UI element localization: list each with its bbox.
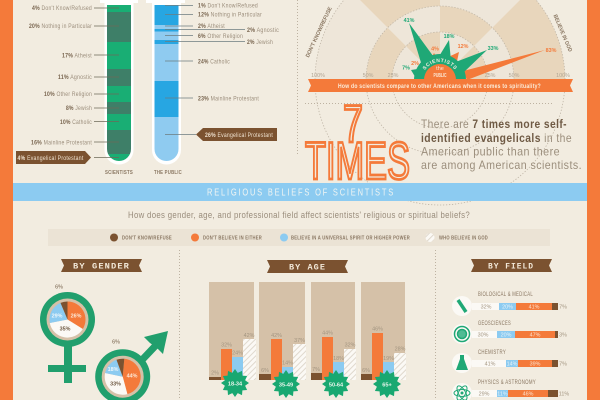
icon: DNA strand [452,296,472,316]
callout: 26% evangelical [196,128,277,141]
field row: geosciences: 30% [478,332,489,338]
labels: scientists: 11% Agnostic [58,74,92,81]
callout: 26% evangelical: 26% Evangelical Protestant [205,132,273,139]
field row: geosciences: 47% [530,332,541,338]
labels: scientists: 8% Jewish [66,105,92,112]
value labels: 41% [404,18,415,24]
bar group: 50-64: 7% [312,367,320,373]
scale labels: 50% [509,73,520,79]
male symbol pie: 6% [112,340,120,346]
ribbon caption: How do scientists compare to other Americans when it comes to spirituality? [338,84,541,90]
labels: the public: 6% Other Religion [198,33,243,40]
radial chart: spirituality [305,0,573,206]
field row: chemistry [452,349,567,373]
test tube: scientists [94,0,138,164]
bar group: 35-49: 14% [282,360,293,366]
radial chart: spirituality: the [436,66,444,72]
bar group: 18-34: 32% [221,342,232,348]
statement text: American public than there [421,144,560,158]
value labels [402,18,557,72]
bar group: 65+: 6% [362,368,370,374]
statement text: are among American scientists. [421,158,582,172]
field row: geosciences [452,320,567,344]
green spikes [409,23,487,80]
field row: biological and medical: 32% [481,304,492,310]
bar group: 35-49: 6% [261,368,269,374]
field row: chemistry: 14% [507,362,518,368]
labels: the public [198,2,279,102]
legend: DON'T KNOW/REFUSE [122,236,172,242]
labels: the public: 1% Don't Know/Refused [198,2,258,10]
section subtitle: How does gender, age, and professional field affect scientists' religious or spiritual beliefs? [128,210,470,221]
centre badge [414,54,466,80]
field row: geosciences: GEOSCIENCES [478,320,511,327]
field row: physics and astronomy: 29% [479,392,490,398]
labels: the public: 2% Atheist [198,23,225,30]
right orange border [587,0,600,400]
callout: 4% evangelical [16,151,91,164]
bar group: 65+: 65+ [382,382,392,388]
bar group: 50-64: 50-64 [329,382,344,388]
scale labels: 100% [556,73,570,79]
scale labels: 25% [485,73,496,79]
labels: scientists: 16% Mainline Protestant [31,140,92,146]
legend: BELIEVE IN A UNIVERSAL SPIRIT OR HIGHER POWER [291,236,410,242]
radial chart: spirituality: SCIENTISTS [422,58,457,70]
bar group: 50-64: 32% [345,342,356,348]
field row: biological and medical: 20% [502,304,513,310]
value labels: 2% [411,61,419,67]
bar group: 35-49 [259,282,306,398]
labels: the public: 2% Agnostic [247,27,279,34]
labels: the public: 23% Mainline Protestant [198,96,259,102]
statement text: identified evangelicals in the [421,131,572,145]
tube captions: SCIENTISTS [105,170,133,176]
female symbol pie [40,284,95,383]
statement text [421,117,582,172]
bar group: 50-64 [311,282,356,398]
field row: chemistry: CHEMISTRY [478,349,506,356]
bar group: 65+ [361,282,406,398]
section banner [13,183,587,201]
bar group: 35-49: 35-49 [279,382,293,388]
legend [48,229,550,246]
section banner: RELIGIOUS BELIEFS OF SCIENTISTS [207,188,395,198]
field row: chemistry: 39% [530,362,541,368]
male symbol pie: 33% [110,382,121,388]
value labels: 12% [458,44,469,50]
scale labels [311,73,570,79]
bar group: 18-34: 24% [232,350,243,356]
labels: scientists: 17% Atheist [62,52,92,60]
scale labels: 25% [388,73,399,79]
labels: scientists: 20% Nothing in Particular [29,23,92,30]
value labels: 18% [444,34,455,40]
big number: 7 times: 7 [343,95,363,154]
icon: flask [452,353,472,373]
value labels: 4% [431,46,439,52]
bar group: 35-49: 37% [294,338,305,344]
labels: scientists: 4% Don't Know/Refused [32,5,92,12]
field row: biological and medical: 41% [529,304,540,310]
ribbon caption [308,79,573,92]
value labels: 7% [402,66,410,72]
labels: the public: 12% Nothing in Particular [198,12,262,18]
field row: geosciences: 3% [559,332,567,338]
labels: scientists: 10% Other Religion [44,91,92,98]
legend: DON'T BELIEVE IN EITHER [203,236,262,242]
bar group: 18-34: 2% [211,370,219,376]
value labels: 83% [546,48,557,54]
bar group: 65+: 46% [372,326,383,332]
big number: 7 times [305,95,410,191]
field row: biological and medical [452,291,567,316]
radial chart: spirituality: PUBLIC [434,73,447,79]
female symbol pie: 6% [55,284,63,290]
ribbon: by gender [61,259,142,272]
field row: geosciences: 20% [501,332,512,338]
field row: physics and astronomy: 11% [497,392,508,398]
left orange border [0,0,13,400]
female symbol pie: 26% [71,314,82,320]
orange spikes [418,50,545,80]
male symbol pie: 44% [127,374,138,380]
icon: atom [452,383,472,400]
bar group: 65+: 19% [383,356,394,362]
test tube: the public [146,0,245,164]
male symbol pie: 18% [108,367,119,373]
statement text: There are 7 times more self- [421,117,567,131]
bar group: 65+: 28% [395,346,406,352]
labels: scientists: 10% Catholic [60,119,92,126]
big number: 7 times: TIMES [305,132,410,191]
labels: the public: 24% Catholic [198,58,230,66]
labels: scientists [29,5,92,146]
bar group: 18-34 [209,282,256,397]
female symbol pie: 35% [60,326,71,332]
bar group: 50-64: 18% [333,356,344,362]
bar group: 18-34: 42% [244,333,255,339]
ribbon: by age [267,260,348,273]
female symbol pie: 29% [52,314,63,320]
field row: physics and astronomy [452,379,569,400]
bar group: 18-34: 18-34 [228,382,243,388]
field row: chemistry: 7% [559,362,567,368]
field row: chemistry: 41% [485,362,496,368]
bar group: 35-49: 42% [271,333,282,339]
value labels: 33% [488,46,499,52]
icon: globe [452,324,472,344]
ribbon: by field [471,259,552,272]
legend: WHO BELIEVE IN GOD [439,236,488,242]
radial chart: spirituality: BELIEVE IN GOD [552,14,573,53]
field row: biological and medical: 7% [559,304,567,310]
field row: biological and medical: BIOLOGICAL & MEDICAL [478,291,533,298]
scale labels: 100% [311,73,325,79]
scale labels: 50% [363,73,374,79]
labels: the public: 2% Jewish [247,39,273,46]
ribbon: by field: BY FIELD [488,262,534,271]
field row: physics and astronomy: PHYSICS & ASTRONOMY [478,379,536,386]
tube captions [105,170,182,176]
ribbon: by gender: BY GENDER [73,262,130,271]
callout: 4% evangelical: 4% Evangelical Protestant [18,155,84,162]
field row: physics and astronomy: 46% [523,392,534,398]
bar group: 50-64: 44% [322,330,333,336]
axis labels: DON'T KNOW/REFUSE [305,6,334,59]
ribbon: by age: BY AGE [289,263,326,272]
male symbol pie [95,331,168,400]
tube captions: THE PUBLIC [154,170,182,176]
field row: physics and astronomy: 11% [559,392,569,398]
